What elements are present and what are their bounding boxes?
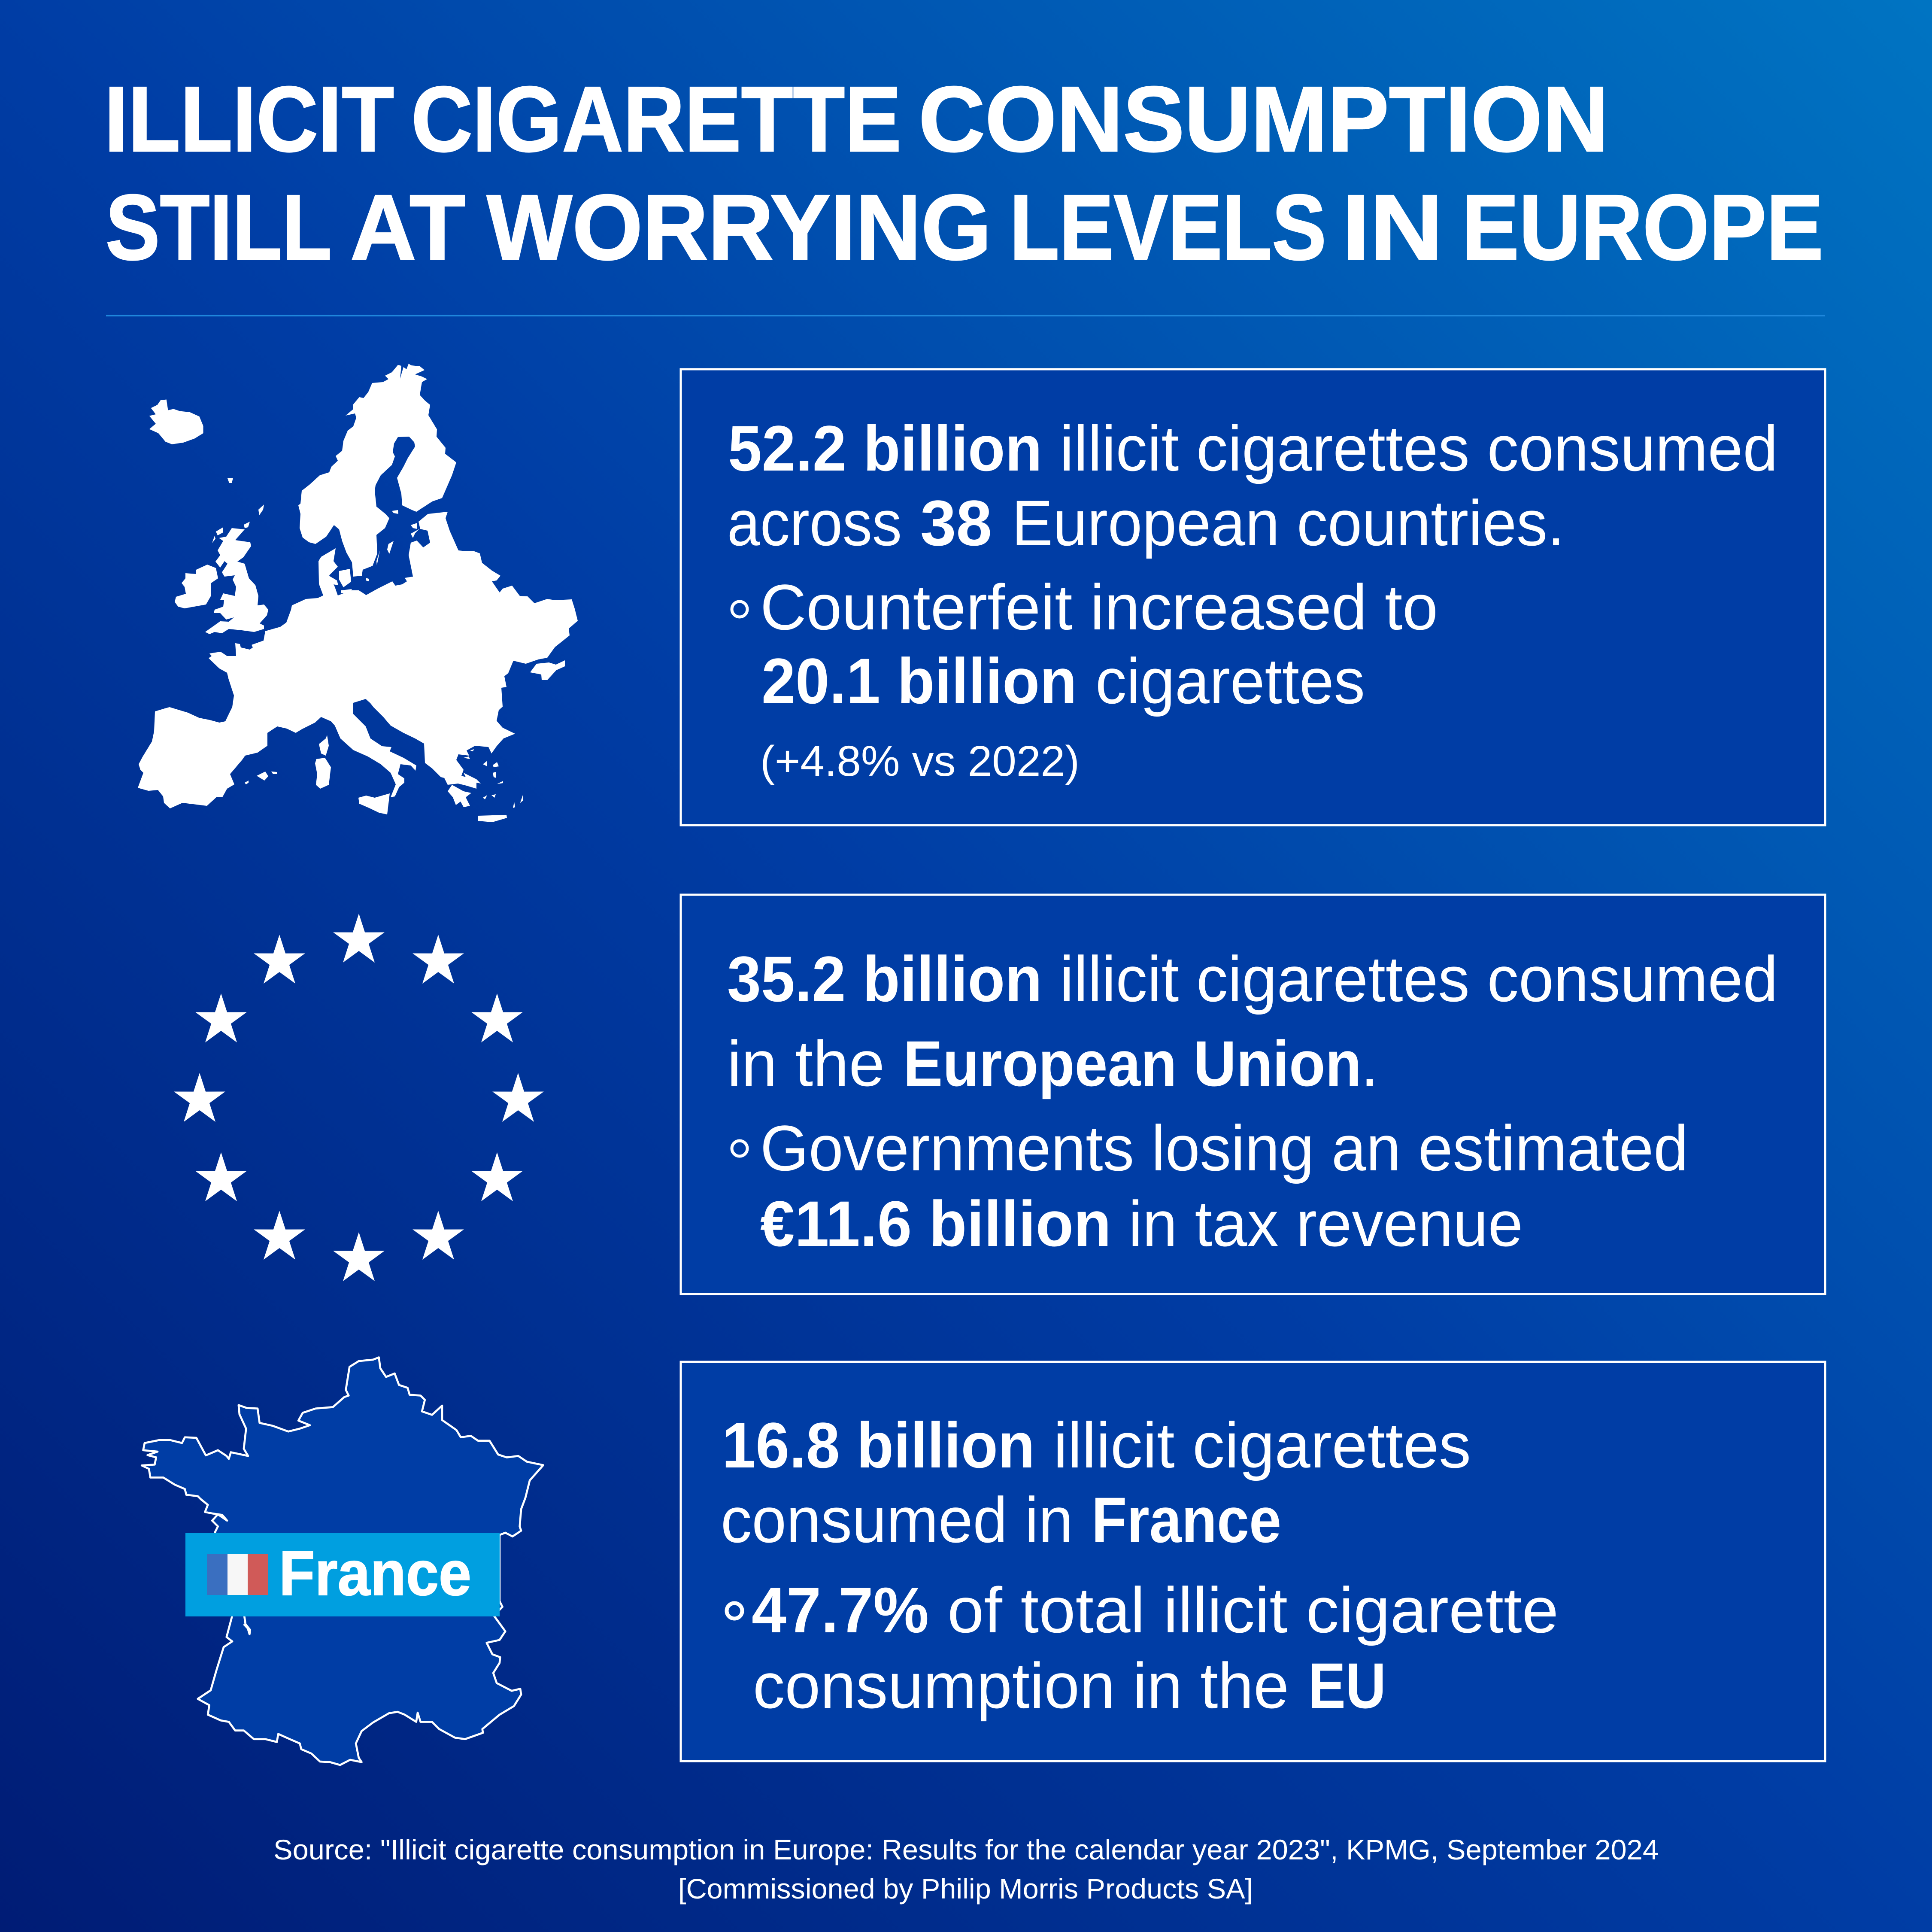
bullet icon (732, 1141, 747, 1156)
bullet icon (727, 1603, 742, 1619)
source note: [Commissioned by Philip Morris Products SA] (678, 1873, 1253, 1905)
headline text: across (727, 487, 902, 559)
headline text: 35.2 billion (727, 943, 1042, 1015)
bullet text: consumption in the (753, 1649, 1289, 1722)
flag (207, 1554, 268, 1595)
icon: EU circle of stars (174, 914, 544, 1281)
headline text: illicit cigarettes consumed (1060, 412, 1778, 484)
headline text: 16.8 billion (722, 1409, 1035, 1481)
bullet text: 47.7% (752, 1574, 929, 1646)
bullet text: (+4.8% vs 2022) (760, 737, 1080, 785)
bullet text: cigarettes (1095, 645, 1365, 717)
headline text (727, 943, 1778, 1100)
headline text: European Union (903, 1027, 1362, 1100)
source note: Source: "Illicit cigarette consumption in Europe: Results for the calendar year 2023", KPMG, September 2024 (273, 1834, 1659, 1865)
title: CIGARETTE (411, 67, 901, 171)
title: IN (1342, 175, 1443, 279)
title: STILL (106, 175, 332, 279)
Ireland (175, 565, 218, 608)
headline text (727, 412, 1778, 559)
Iceland (149, 400, 203, 444)
bullet text: €11.6 billion (760, 1188, 1111, 1260)
bullet text (760, 1112, 1688, 1260)
bullet text: 20.1 billion (761, 645, 1077, 717)
panel: Europe (681, 369, 1825, 825)
bullet text (760, 571, 1438, 785)
icon: map of Europe (138, 364, 578, 822)
bullet text: Counterfeit increased to (760, 571, 1438, 643)
Great Britain (205, 528, 268, 634)
bullet text: EU (1308, 1649, 1386, 1722)
title: AT (350, 175, 465, 279)
headline text: 52.2 billion (728, 412, 1042, 484)
islands (212, 478, 565, 822)
label badge (185, 1533, 500, 1616)
bullet text (752, 1574, 1559, 1722)
title: WORRYING (487, 175, 992, 279)
bullet icon (732, 601, 747, 617)
bullet text: of total illicit cigarette (947, 1574, 1559, 1646)
title: EUROPE (1462, 175, 1823, 279)
Scandinavia and Finland (298, 364, 456, 577)
panel: European Union (681, 895, 1825, 1294)
headline text: consumed in (721, 1484, 1073, 1556)
bullet text: Governments losing an estimated (760, 1112, 1688, 1184)
headline text: in the (727, 1027, 885, 1100)
panel: France (681, 1362, 1825, 1761)
headline text (721, 1409, 1471, 1556)
France outline (142, 1358, 543, 1765)
title: LEVELS (1010, 175, 1326, 279)
bullet text: in tax revenue (1128, 1188, 1523, 1260)
title (104, 67, 1823, 279)
headline text: . (1361, 1027, 1379, 1100)
label text: France (279, 1538, 471, 1609)
headline text: 38 (920, 487, 992, 559)
title: ILLICIT (104, 67, 394, 171)
continental Europe (138, 512, 578, 808)
headline text: illicit cigarettes consumed (1060, 943, 1778, 1015)
source note (273, 1834, 1659, 1905)
title: CONSUMPTION (919, 67, 1609, 171)
headline text: European countries. (1012, 487, 1565, 559)
headline text: France (1092, 1484, 1281, 1556)
icon: map of France with label (142, 1358, 543, 1765)
headline text: illicit cigarettes (1053, 1409, 1471, 1481)
